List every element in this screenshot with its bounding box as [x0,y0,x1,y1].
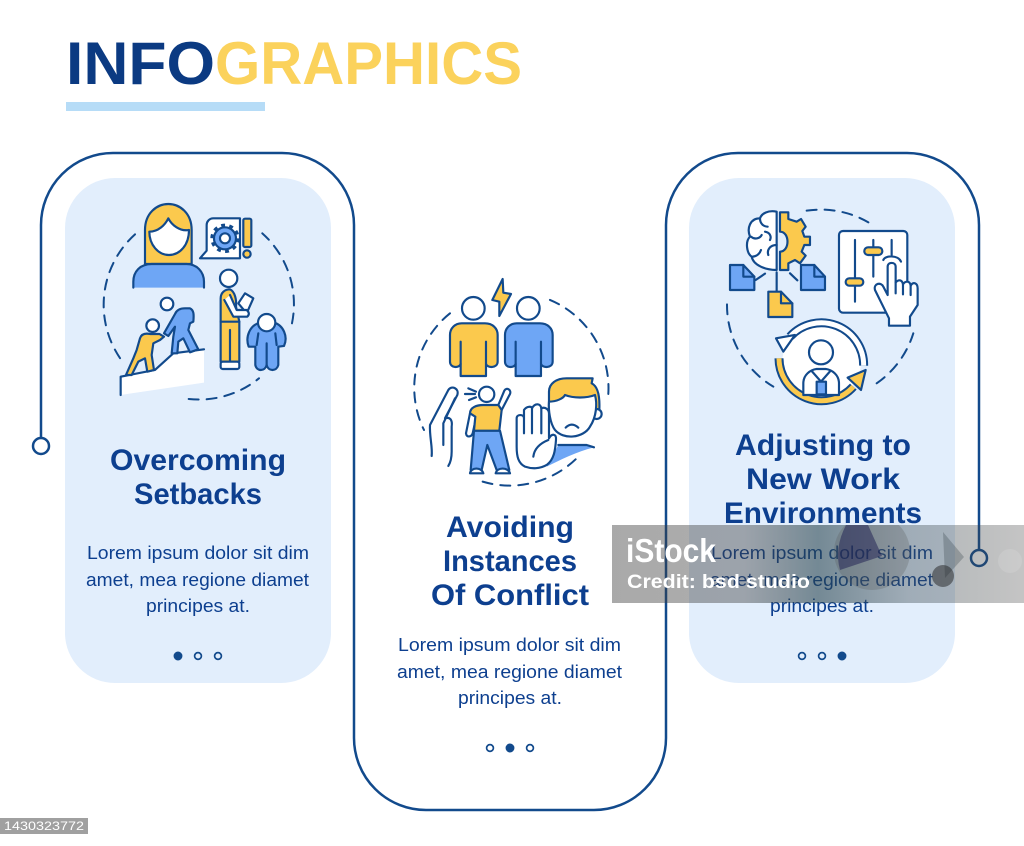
heading [724,429,922,530]
image id label: 1430323772 [4,821,84,833]
body text: Lorem ipsum dolor sit dim [398,635,621,655]
body text: principes at. [146,596,250,616]
icon: avoiding conflict [414,279,608,486]
heading: New Work [746,463,900,496]
panel: overcoming setbacks [65,178,331,683]
heading: Of Conflict [431,579,589,612]
title: INFO [66,30,215,97]
icon: overcoming setbacks [104,204,294,400]
title: GRAPHICS [215,30,522,97]
panel background [689,178,955,683]
body text: Lorem ipsum dolor sit dim [87,543,309,563]
body text [397,635,622,708]
watermark logo: iStock [626,532,717,569]
body text: amet, mea regione diamet [397,662,622,682]
heading: Setbacks [134,478,262,511]
panel: adjusting to new work environments [689,178,955,683]
body text: amet, mea regione diamet [710,570,933,590]
icon: adjusting to work [727,210,918,401]
watermark credit: Credit: bsd studio [627,572,810,593]
body text: principes at. [458,688,562,708]
panel: avoiding conflict [397,279,622,752]
body text [710,543,933,616]
pagination dots [174,652,221,660]
heading: Adjusting to [735,429,911,462]
heading [431,511,589,612]
body text: Lorem ipsum dolor sit dim [711,543,933,563]
heading: Overcoming [110,444,286,477]
pagination dots [487,744,533,752]
pagination dots [799,652,846,660]
panel background [65,178,331,683]
heading [110,444,286,511]
title [66,30,522,97]
image id label [0,818,88,834]
body text [86,543,309,616]
heading: Instances [443,545,577,578]
timeline outline [33,153,987,810]
heading: Environments [724,497,922,530]
title underline [66,102,265,111]
watermark banner [612,525,1024,603]
body text: principes at. [770,596,874,616]
heading: Avoiding [446,511,574,544]
body text: amet, mea regione diamet [86,570,309,590]
